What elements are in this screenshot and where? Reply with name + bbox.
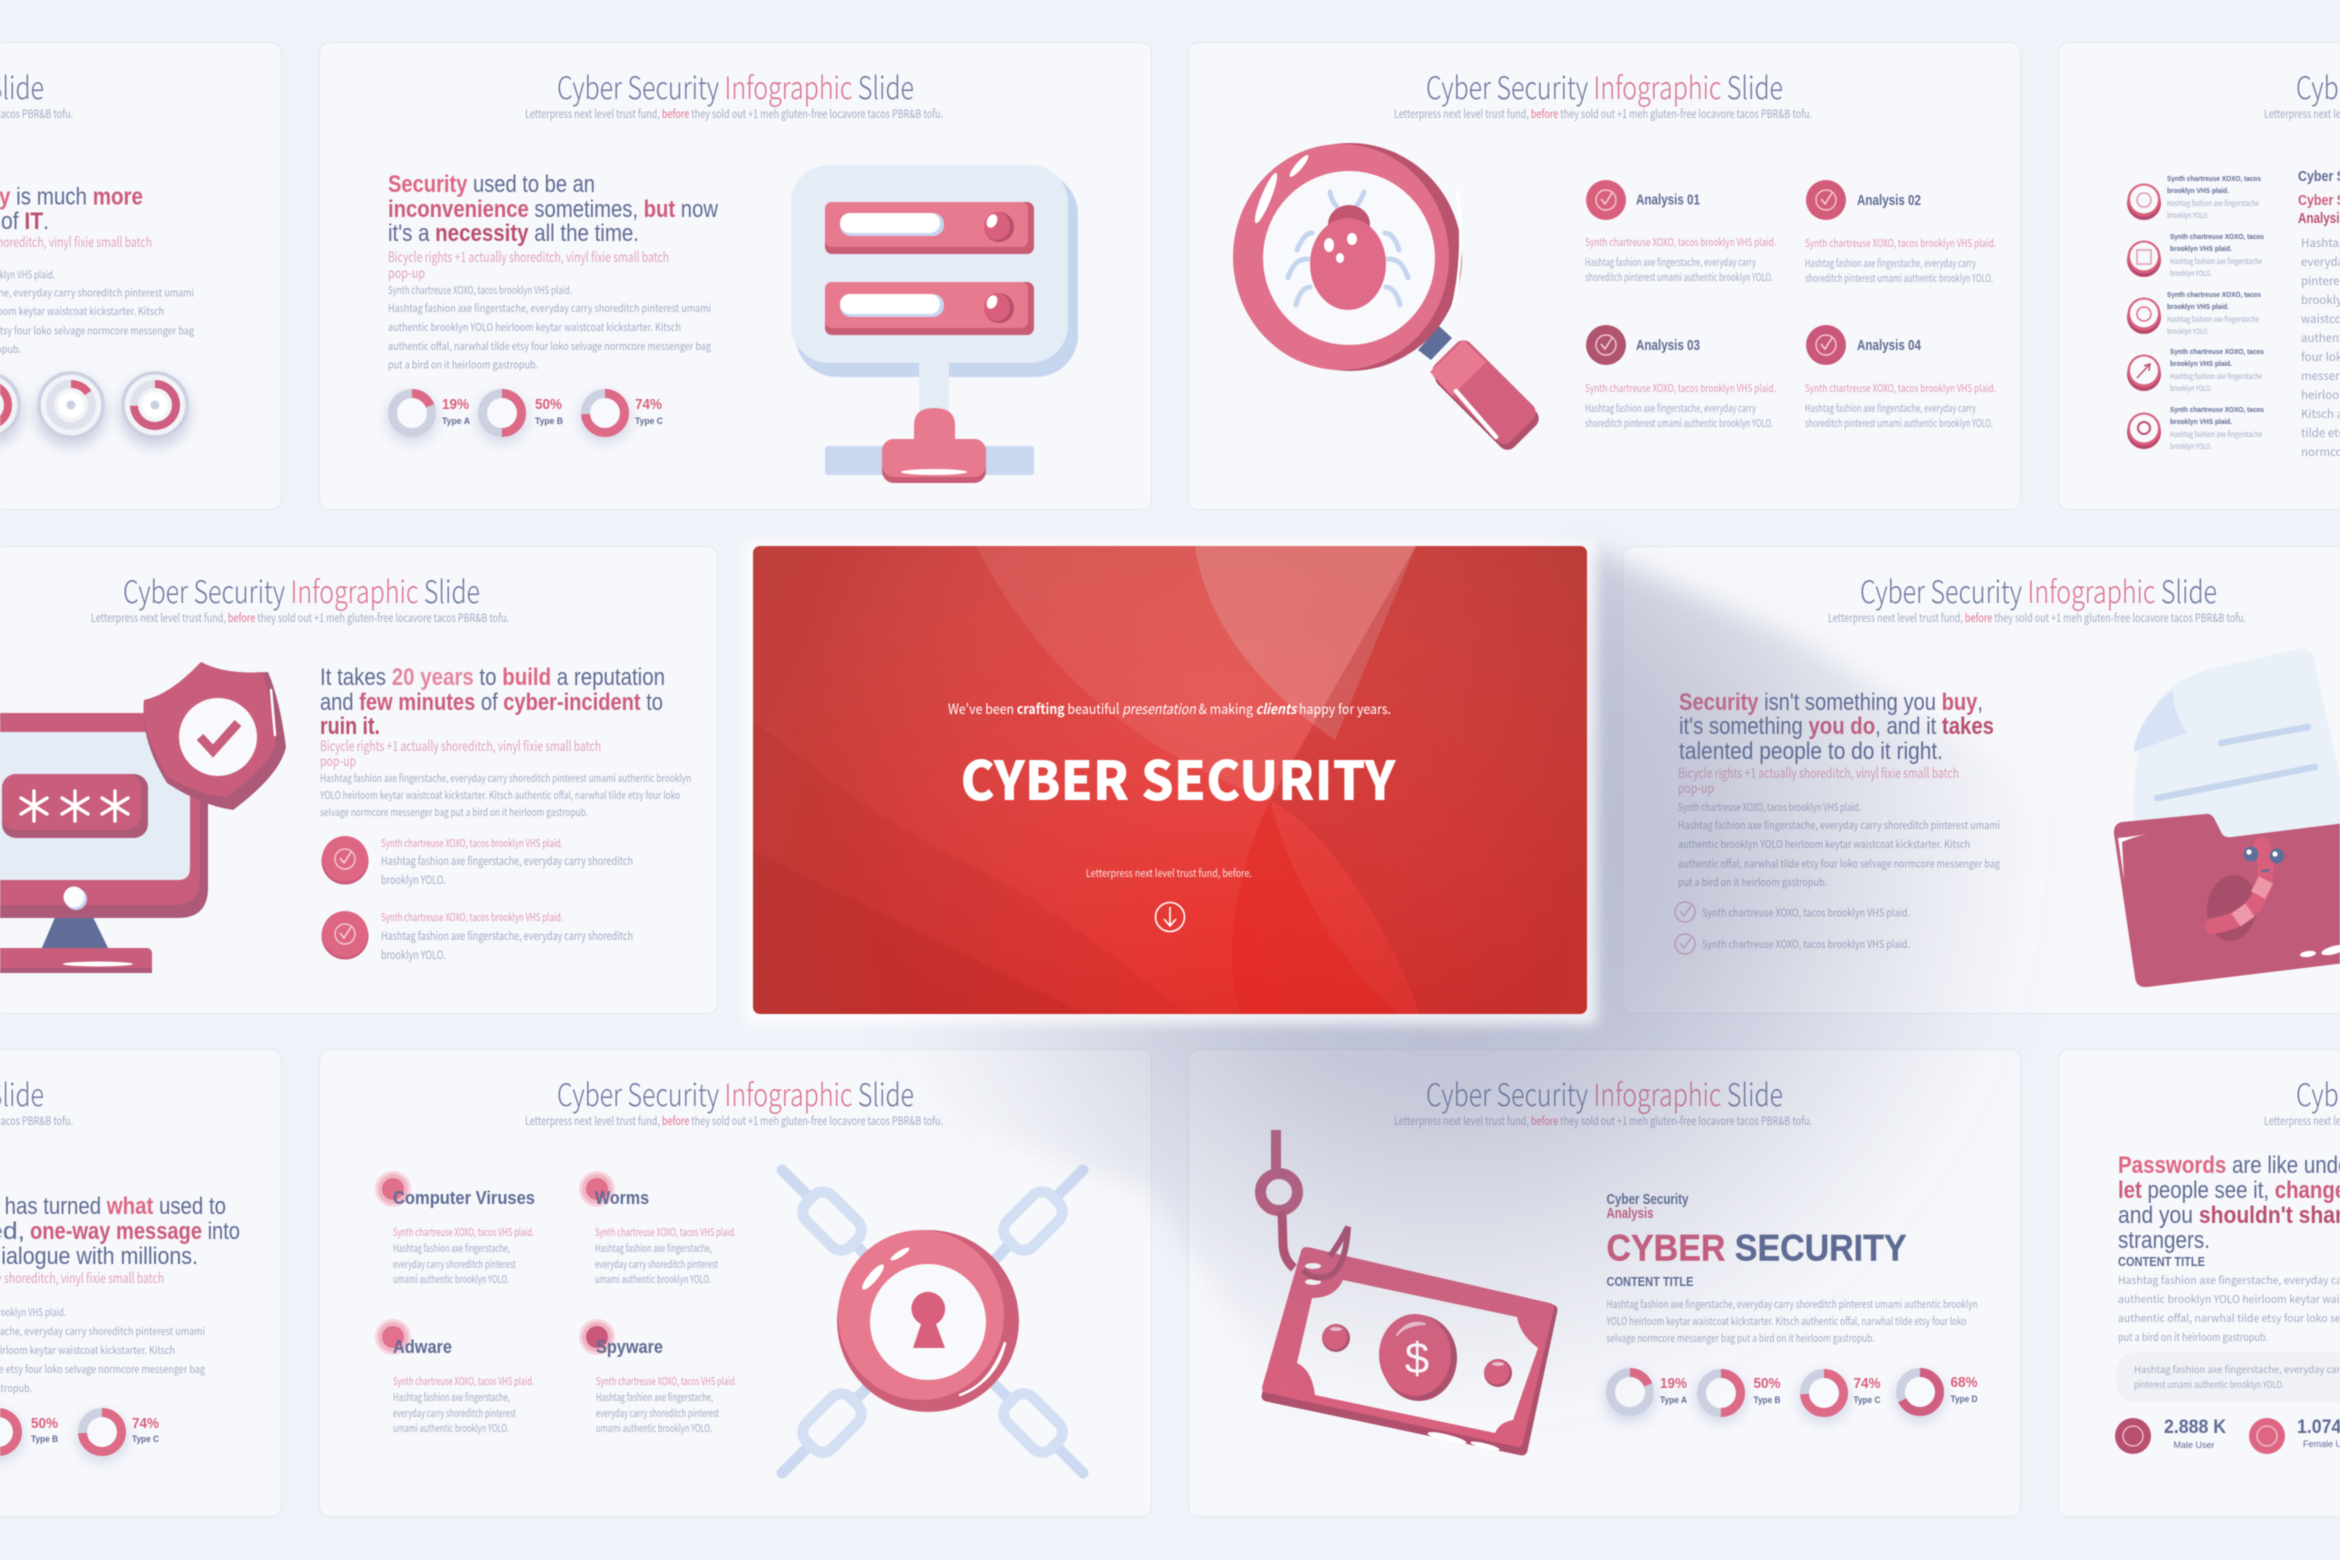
panel: row 1 magnifier analysis slide: Cyber Security Infographic Slide (1426, 63, 1783, 108)
quote heading: strangers. (2118, 1227, 2210, 1254)
body copy: put a bird on it heirloom gastropub. (388, 358, 538, 372)
icon list: Hashtag fashion axe fingerstache (2170, 256, 2262, 267)
threat list: everyday carry shoreditch pinterest (393, 1406, 516, 1421)
panel: row 1 server slide: Letterpress next level trust fund, before they sold out +1 meh gluten-free locavore tacos PBR&B tofu. (525, 106, 943, 122)
donut charts: Type C (1854, 1395, 1881, 1405)
analysis items: Analysis 02 (1857, 193, 1921, 209)
icon list: brooklyn VHS plaid. (2170, 244, 2232, 253)
donut charts: Type C (635, 416, 663, 426)
icon list: brooklyn VHS plaid. (2167, 186, 2229, 195)
panel: row 1 server slide: Cyber Security Infographic Slide (557, 63, 914, 108)
body copy: Bicycle rights +1 actually shoreditch, vinyl fixie small batch (320, 736, 601, 756)
quote heading: Security used to be an (388, 171, 595, 198)
threat list: Synth chartreuse XOXO, tacos VHS plaid. (595, 1225, 736, 1240)
donut charts: Type A (442, 416, 470, 426)
panel: row 3 phishing money slide (1188, 1050, 2020, 1516)
panel: row 1 right slide, icon list (2058, 42, 2340, 510)
analysis items: Hashtag fashion axe fingerstache, everyday carry (1585, 401, 1756, 416)
body copy (0, 1268, 205, 1396)
content text: CONTENT TITLE (1606, 1274, 1694, 1289)
quote heading: ruin it. (320, 713, 380, 740)
analysis items: Hashtag fashion axe fingerstache, everyday carry (1805, 256, 1976, 271)
donut charts: Type B (1754, 1395, 1781, 1405)
icon list: brooklyn YOLO. (2170, 268, 2212, 279)
user stats (2115, 1417, 2340, 1454)
body copy (0, 232, 194, 357)
body copy (319, 736, 691, 820)
donut charts: 50% (535, 397, 562, 413)
threat list (375, 1171, 737, 1436)
analysis items: Synth chartreuse XOXO, tacos brooklyn VHS plaid. (1585, 235, 1776, 250)
panel: row 3 phishing money slide: Cyber Security Infographic Slide (1426, 1070, 1783, 1115)
analysis items: Synth chartreuse XOXO, tacos brooklyn VHS plaid. (1805, 236, 1996, 251)
panel: row 3 left slide, social media quote (0, 1050, 282, 1516)
quote heading (388, 171, 719, 247)
quote heading: it's something you do, and it takes (1679, 713, 1994, 740)
donut charts (1604, 1368, 1978, 1424)
callout box: pinterest umami authentic brooklyn YOLO. (2134, 1377, 2284, 1391)
body copy: Hashtag fashion axe fingerstache, everyday carry shoreditch pinterest umami (1678, 818, 2000, 833)
body copy (2118, 1254, 2340, 1345)
content text: selvage normcore messenger bag put a bird on it heirloom gastropub. (1606, 1331, 1875, 1346)
content text: Hashtag fashion axe fingerstache, everyday carry shoreditch pinterest umami authentic brooklyn (1606, 1297, 1978, 1312)
threat list: Hashtag fashion axe fingerstache, (595, 1241, 712, 1256)
icon list: Synth chartreuse XOXO, tacos (2170, 232, 2264, 241)
icon list: brooklyn YOLO. (2167, 210, 2209, 221)
analysis items: shoreditch pinterest umami authentic brooklyn YOLO. (1805, 271, 1993, 286)
donut charts: Type C (132, 1434, 159, 1444)
icon list: Synth chartreuse XOXO, tacos (2170, 347, 2264, 356)
analysis items: Analysis 03 (1636, 338, 1700, 354)
threat list: everyday carry shoreditch pinterest (595, 1257, 718, 1272)
panel: row 3 phishing money slide: Letterpress next level trust fund, before they sold out +1 meh gluten-free locavore tacos PBR&B tofu. (1394, 1113, 1812, 1129)
panel: row 1 magnifier analysis slide (1188, 42, 2020, 510)
body copy: CONTENT TITLE (2118, 1254, 2205, 1269)
quote heading: talented people to do it right. (1679, 738, 1943, 765)
icon list: brooklyn YOLO. (2170, 441, 2212, 452)
icon list: Synth chartreuse XOXO, tacos (2167, 290, 2261, 299)
check items: Hashtag fashion axe fingerstache, everyday carry shoreditch (381, 928, 633, 944)
check items: brooklyn YOLO. (381, 947, 446, 963)
body copy: Bicycle rights +1 actually shoreditch, vinyl fixie small batch (1678, 763, 1959, 783)
callout box (2116, 1352, 2340, 1402)
body copy: pop-up (1678, 778, 1714, 798)
threat list: Adware (393, 1337, 452, 1357)
user stats: 2.888 K (2164, 1417, 2226, 1438)
content text: CYBER SECURITY (1606, 1228, 1907, 1268)
icon list: Hashtag fashion axe fingerstache (2167, 314, 2259, 325)
content text: Cyber Security (1606, 1192, 1688, 1208)
quote heading: inconvenience sometimes, but now (388, 196, 719, 223)
quote heading: It takes 20 years to build a reputation (320, 664, 665, 691)
analysis items: Analysis 04 (1857, 338, 1921, 354)
icon list: Hashtag fashion axe fingerstache (2167, 198, 2259, 209)
icon: server (791, 165, 1078, 483)
donut charts: 19% (1660, 1376, 1687, 1392)
body copy: authentic brooklyn YOLO heirloom keytar waistcoat kickstarter. Kitsch (388, 320, 681, 335)
analysis items (1585, 180, 1996, 431)
threat list: umami authentic brooklyn YOLO. (393, 1421, 509, 1436)
analysis items: Synth chartreuse XOXO, tacos brooklyn VHS plaid. (1805, 381, 1996, 396)
body copy: authentic offal, narwhal tilde etsy four loko selvage normcore messenger bag (1678, 856, 2000, 872)
icon list: brooklyn VHS plaid. (2170, 359, 2232, 368)
long shadow of the centre card (753, 546, 2200, 1460)
icon list: brooklyn YOLO. (2167, 326, 2209, 337)
body copy: Synth chartreuse XOXO, tacos brooklyn VHS plaid. (1678, 800, 1861, 815)
icon list: brooklyn VHS plaid. (2170, 417, 2232, 426)
donut charts: 74% (132, 1416, 159, 1432)
panel: row 1 server slide (320, 42, 1152, 510)
icon: hook and banknote: $ (1405, 1334, 1429, 1383)
panel: row 2 left slide, password monitor (0, 546, 718, 1014)
analysis items: Hashtag fashion axe fingerstache, everyday carry (1585, 255, 1756, 270)
quote heading: Security isn't something you buy, (1679, 689, 1983, 716)
icon list (2127, 174, 2264, 452)
subtitle: Letterpress next level trust fund, before. (1086, 865, 1252, 881)
icon: chains and lock (782, 1170, 1083, 1473)
analysis items: shoreditch pinterest umami authentic brooklyn YOLO. (1805, 416, 1993, 431)
icon: monitor with password and shield (0, 662, 286, 973)
threat list: Computer Viruses (393, 1188, 535, 1208)
icon: document (2133, 648, 2340, 850)
content text: YOLO heirloom keytar waistcoat kickstarter. Kitsch authentic offal, narwhal tilde etsy four loko (1606, 1314, 1966, 1329)
donut charts: 74% (1854, 1376, 1881, 1392)
check items: Hashtag fashion axe fingerstache, everyday carry shoreditch (381, 853, 633, 869)
check items: Synth chartreuse XOXO, tacos brooklyn VHS plaid. (381, 836, 563, 851)
threat list: Hashtag fashion axe fingerstache, (393, 1241, 510, 1256)
donut charts: Type A (1660, 1395, 1687, 1405)
quote heading: one-way message into (30, 1218, 240, 1245)
threat list: Hashtag fashion axe fingerstache, (393, 1390, 510, 1405)
donut charts: Type D (1950, 1394, 1978, 1404)
body copy (1678, 763, 2000, 890)
check items: brooklyn YOLO. (381, 872, 446, 888)
analysis items: Hashtag fashion axe fingerstache, everyday carry (1805, 401, 1976, 416)
donut charts: 50% (1754, 1376, 1781, 1392)
side text column (2298, 169, 2340, 460)
content text (1606, 1192, 1978, 1346)
check items: Synth chartreuse XOXO, tacos brooklyn VHS plaid. (381, 910, 563, 925)
threat list: umami authentic brooklyn YOLO. (393, 1272, 509, 1287)
panel: row 2 right slide, worm folder (1622, 546, 2340, 1014)
check list: Synth chartreuse XOXO, tacos brooklyn VHS plaid. (1702, 937, 1910, 952)
threat list: everyday carry shoreditch pinterest (596, 1406, 719, 1421)
body copy: pop-up (320, 751, 356, 771)
threat list: Hashtag fashion axe fingerstache, (596, 1390, 713, 1405)
check list (1675, 902, 1910, 954)
donut charts: Type B (535, 416, 563, 426)
donut charts: 68% (1950, 1375, 1978, 1391)
body copy: put a bird on it heirloom gastropub. (2118, 1330, 2268, 1345)
icon list: Synth chartreuse XOXO, tacos (2167, 174, 2261, 183)
body copy: Hashtag fashion axe fingerstache, everyday carry shoreditch pinterest umami authentic brooklyn (320, 771, 691, 786)
quote heading (0, 184, 143, 235)
quote heading: and few minutes of cyber-incident to (320, 689, 663, 716)
panel: row 2 right slide, worm folder: Letterpress next level trust fund, before they sold out +1 meh gluten-free locavore tacos PBR&B tofu. (1828, 610, 2246, 626)
ring charts (0, 373, 191, 448)
body copy: YOLO heirloom keytar waistcoat kickstarter. Kitsch authentic offal, narwhal tilde etsy four loko (319, 788, 680, 803)
panel: centre hero card (745, 540, 1597, 1024)
threat list: Worms (595, 1188, 649, 1208)
panel: row 2 right slide, worm folder: Cyber Security Infographic Slide (1860, 567, 2217, 612)
body copy (388, 247, 711, 372)
analysis items: Analysis 01 (1636, 192, 1700, 208)
panel: row 2 left slide, password monitor: Cyber Security Infographic Slide (123, 567, 480, 612)
donut charts: 74% (635, 397, 662, 413)
panel: row 3 right slide, passwords quote (2058, 1050, 2340, 1516)
icon: magnifier with bug (1233, 143, 1543, 454)
donut charts (386, 389, 663, 444)
icon list: brooklyn VHS plaid. (2167, 302, 2229, 311)
user stats: Male User (2173, 1440, 2215, 1450)
threat list: Spyware (596, 1337, 663, 1357)
threat list: umami authentic brooklyn YOLO. (595, 1272, 711, 1287)
body copy: authentic brooklyn YOLO heirloom keytar waistcoat kickstarter. Kitsch (1678, 837, 1970, 852)
threat list: Synth chartreuse XOXO, tacos VHS plaid. (596, 1374, 737, 1389)
quote heading (1679, 689, 1994, 765)
panel: row 3 threats slide with lock (320, 1050, 1152, 1516)
icon list: Hashtag fashion axe fingerstache (2170, 371, 2262, 382)
body copy: Hashtag fashion axe fingerstache, everyday carry shoreditch pinterest umami (388, 301, 711, 316)
quote heading (2118, 1152, 2340, 1254)
content text: Analysis (1606, 1206, 1654, 1222)
analysis items: Synth chartreuse XOXO, tacos brooklyn VHS plaid. (1585, 381, 1776, 396)
icon: down arrow (1156, 902, 1184, 932)
body copy: pop-up (388, 263, 425, 283)
panel: row 1 left slide, IT quote (0, 42, 282, 510)
donut charts: 50% (31, 1416, 58, 1432)
panel: row 3 threats slide with lock: Cyber Security Infographic Slide (557, 1070, 914, 1115)
body copy: authentic offal, narwhal tilde etsy four loko selvage normcore messenger bag (388, 339, 711, 354)
donut charts: 19% (442, 397, 469, 413)
icon: hook and banknote (1260, 1130, 1552, 1452)
threat list: everyday carry shoreditch pinterest (393, 1257, 516, 1272)
panel: row 3 threats slide with lock: Letterpress next level trust fund, before they sold out +1 meh gluten-free locavore tacos PBR&B tofu. (525, 1113, 943, 1129)
panel: row 2 left slide, password monitor: Letterpress next level trust fund, before they sold out +1 meh gluten-free locavore tacos PBR&B tofu. (91, 610, 509, 626)
hero title: CYBER SECURITY (960, 737, 1397, 816)
threat list: Synth chartreuse XOXO, tacos VHS plaid. (393, 1225, 534, 1240)
icon list: Hashtag fashion axe fingerstache (2170, 429, 2262, 440)
quote heading (320, 664, 665, 740)
icon list: brooklyn YOLO. (2170, 383, 2212, 394)
body copy: put a bird on it heirloom gastropub. (1678, 875, 1827, 890)
check items (322, 836, 633, 963)
body copy: Synth chartreuse XOXO, tacos brooklyn VHS plaid. (388, 283, 572, 298)
threat list: Synth chartreuse XOXO, tacos VHS plaid. (393, 1374, 534, 1389)
analysis items: shoreditch pinterest umami authentic brooklyn YOLO. (1585, 270, 1773, 285)
donut charts: Type B (31, 1434, 58, 1444)
panel: row 1 magnifier analysis slide: Letterpress next level trust fund, before they sold out +1 meh gluten-free locavore tacos PBR&B tofu. (1394, 106, 1812, 122)
quote heading: it's a necessity all the time. (388, 220, 639, 247)
donut charts (0, 1408, 159, 1463)
analysis items: shoreditch pinterest umami authentic brooklyn YOLO. (1585, 416, 1773, 431)
body copy: Bicycle rights +1 actually shoreditch, vinyl fixie small batch (388, 247, 669, 267)
quote heading (0, 1193, 240, 1270)
tagline: We've been crafting beautiful presentation & making clients happy for years. (948, 699, 1391, 719)
body copy: selvage normcore messenger bag put a bird on it heirloom gastropub. (320, 805, 588, 820)
threat list: umami authentic brooklyn YOLO. (596, 1421, 712, 1436)
check list: Synth chartreuse XOXO, tacos brooklyn VHS plaid. (1702, 906, 1910, 920)
icon list: Synth chartreuse XOXO, tacos (2170, 405, 2264, 414)
icon: folder with worm (2114, 814, 2340, 987)
